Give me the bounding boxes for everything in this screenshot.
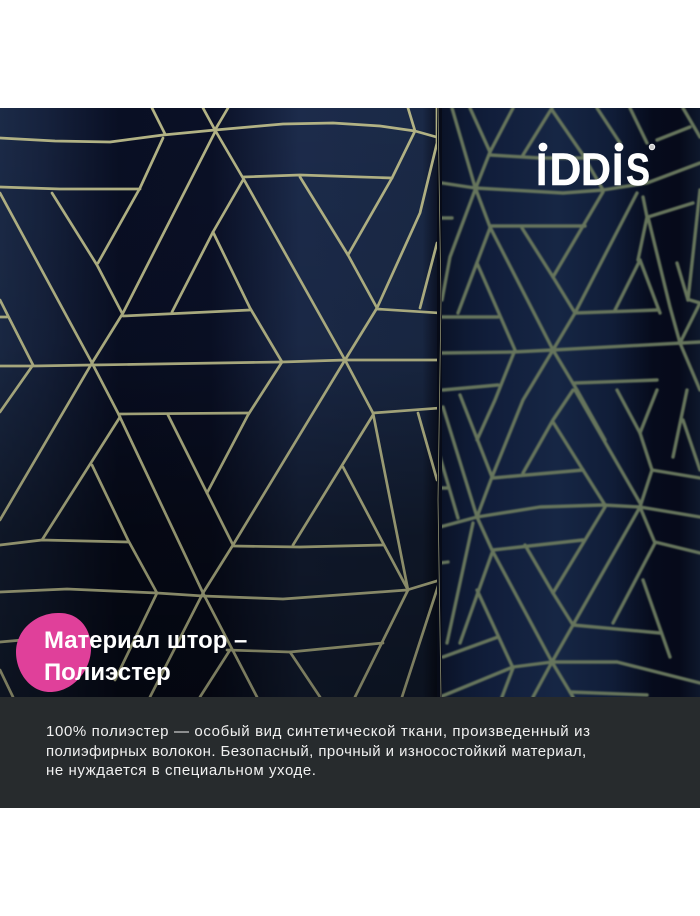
description band [0,697,700,808]
pink blob accent [16,613,91,692]
logo: IDDIS: I [612,145,623,196]
description text: не нуждается в специальном уходе. [46,762,317,779]
curtain photo with geometric pattern [0,108,700,697]
heading [44,627,247,686]
right curtain panel [440,108,700,697]
logo: IDDIS: S [626,144,650,195]
left curtain panel [0,108,440,697]
logo: IDDIS [536,143,655,196]
description text: 100% полиэстер — особый вид синтетической ткани, произведенный из [46,723,591,740]
logo: IDDIS: D [550,146,581,195]
curtain fold edge [437,108,442,697]
heading: Полиэстер [44,659,171,686]
description text [46,723,591,779]
logo: IDDIS: D [581,145,611,195]
heading: Материал штор – [44,627,247,654]
description text: полиэфирных волокон. Безопасный, прочный и износостойкий материал, [46,743,587,760]
logo: IDDIS: I [536,145,547,196]
